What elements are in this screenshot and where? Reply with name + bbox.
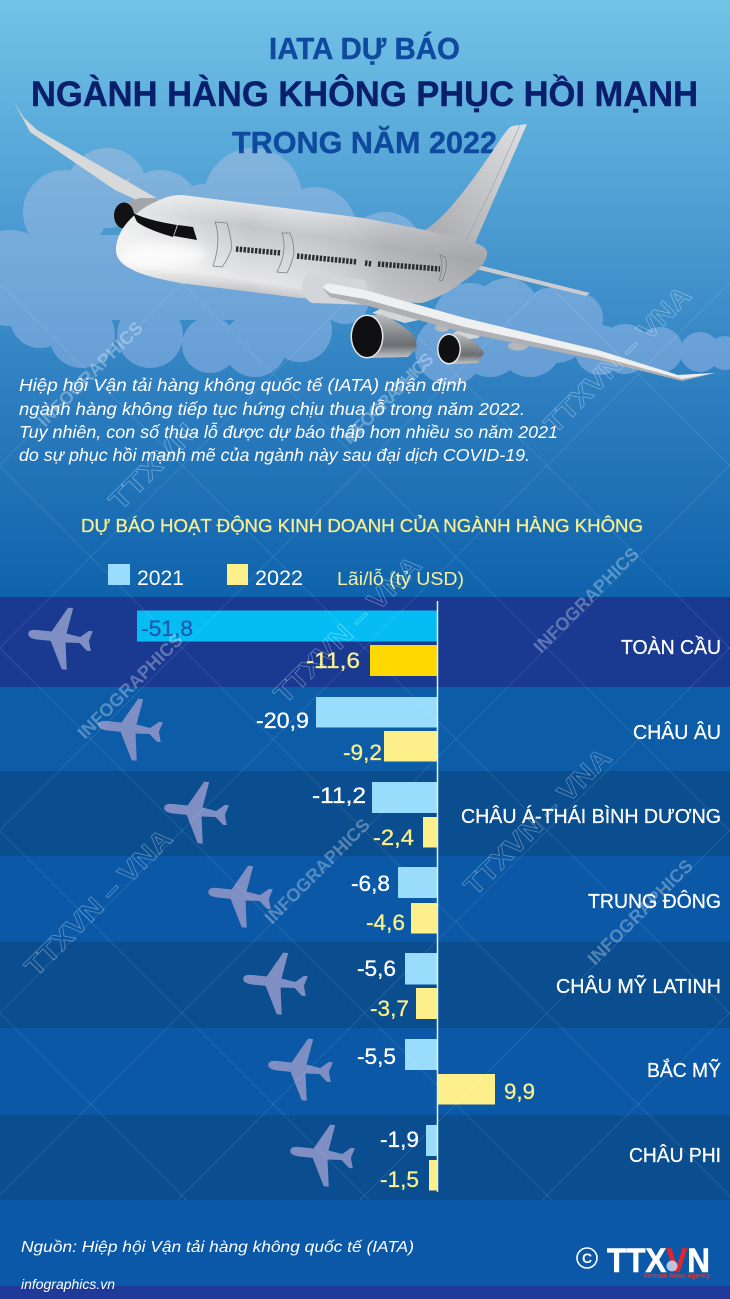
row bands bbox=[0, 597, 730, 1299]
values: -11,6 bbox=[306, 648, 360, 673]
region labels: TOÀN CẦU bbox=[621, 636, 721, 659]
title: NGÀNH HÀNG KHÔNG PHỤC HỒI MẠNH bbox=[31, 74, 698, 114]
watermarks: INFOGRAPHICS bbox=[34, 318, 147, 431]
values: -51,8 bbox=[141, 616, 193, 641]
axis line bbox=[436, 601, 438, 1192]
title: TRONG NĂM 2022 bbox=[232, 125, 497, 160]
horizontal stabilizer bbox=[470, 263, 590, 296]
values: 9,9 bbox=[504, 1079, 535, 1104]
cockpit windows bbox=[133, 213, 197, 240]
values: -9,2 bbox=[343, 740, 382, 765]
engine left bbox=[350, 308, 428, 358]
legend: 2022 bbox=[255, 567, 303, 590]
logo: TTXVN: TTXVN bbox=[607, 1242, 710, 1280]
values: -11,2 bbox=[312, 783, 366, 808]
intro paragraph: do sự phục hồi mạnh mẽ của ngành này sau đại dịch COVID-19. bbox=[19, 445, 530, 465]
region labels: BẮC MỸ bbox=[647, 1058, 721, 1082]
region labels: CHÂU Á-THÁI BÌNH DƯƠNG bbox=[461, 805, 721, 828]
values: -6,8 bbox=[351, 871, 390, 896]
values: -2,4 bbox=[373, 825, 414, 850]
watermarks: INFOGRAPHICS bbox=[530, 544, 643, 657]
website: infographics.vn bbox=[21, 1276, 115, 1292]
intro paragraph: Tuy nhiên, con số thua lỗ được dự báo thấp hơn nhiều so năm 2021 bbox=[19, 422, 558, 442]
values bbox=[141, 616, 535, 1192]
plane icons bbox=[25, 604, 357, 1189]
source note: Nguồn: Hiệp hội Vận tải hàng không quốc tế (IATA) bbox=[21, 1239, 414, 1256]
watermarks: TTXVN bbox=[103, 417, 202, 516]
watermarks: TTXVN – VNA bbox=[268, 550, 427, 709]
values: -3,7 bbox=[370, 996, 409, 1021]
watermarks: TTXVN – VNA bbox=[458, 742, 617, 901]
legend: Lãi/lỗ (tỷ USD) bbox=[337, 568, 464, 589]
fuselage bbox=[116, 195, 487, 303]
clouds bbox=[0, 148, 730, 385]
values: -5,5 bbox=[357, 1044, 396, 1069]
region labels: TRUNG ĐÔNG bbox=[588, 890, 721, 913]
engine right bbox=[437, 328, 485, 364]
values: -20,9 bbox=[256, 708, 309, 733]
legend: 2021 bbox=[137, 567, 184, 590]
logo: TTXVN: C bbox=[582, 1250, 592, 1266]
tail fin bbox=[425, 124, 527, 243]
values: -5,6 bbox=[357, 956, 396, 981]
region labels: CHÂU ÂU bbox=[633, 721, 721, 744]
region labels bbox=[461, 636, 721, 1167]
watermarks bbox=[19, 280, 697, 982]
values: -1,5 bbox=[380, 1167, 419, 1192]
far wing bbox=[14, 102, 160, 207]
watermarks: INFOGRAPHICS bbox=[584, 856, 697, 969]
title bbox=[31, 31, 698, 160]
watermarks: TTXVN – VNA bbox=[19, 823, 178, 982]
intro paragraph: Hiệp hội Vận tải hàng không quốc tế (IATA) nhận định bbox=[19, 375, 467, 395]
legend bbox=[108, 564, 464, 590]
chart heading: DỰ BÁO HOẠT ĐỘNG KINH DOANH CỦA NGÀNH HÀNG KHÔNG bbox=[81, 515, 643, 536]
intro paragraph: ngành hàng không tiếp tục hứng chịu thua lỗ trong năm 2022. bbox=[19, 399, 525, 419]
watermarks: INFOGRAPHICS bbox=[339, 349, 438, 448]
bars bbox=[137, 610, 495, 1190]
intro paragraph bbox=[19, 375, 558, 465]
watermarks: TTXVN – VNA bbox=[538, 280, 697, 439]
region labels: CHÂU MỸ LATINH bbox=[556, 974, 721, 998]
near wing bbox=[322, 283, 715, 381]
cabin windows bbox=[236, 249, 440, 269]
airplane illustration bbox=[14, 102, 715, 381]
wing root fairing bbox=[302, 273, 372, 305]
region labels: CHÂU PHI bbox=[629, 1144, 721, 1167]
far engine bbox=[114, 198, 160, 228]
logo: TTXVN: Vietnam News Agency bbox=[643, 1273, 710, 1280]
watermarks: INFOGRAPHICS bbox=[74, 630, 187, 743]
values: -4,6 bbox=[366, 910, 405, 935]
title: IATA DỰ BÁO bbox=[269, 31, 460, 66]
bar chart bbox=[0, 597, 730, 1299]
doors bbox=[213, 222, 446, 281]
values: -1,9 bbox=[380, 1127, 419, 1152]
watermarks: INFOGRAPHICS bbox=[261, 815, 374, 928]
